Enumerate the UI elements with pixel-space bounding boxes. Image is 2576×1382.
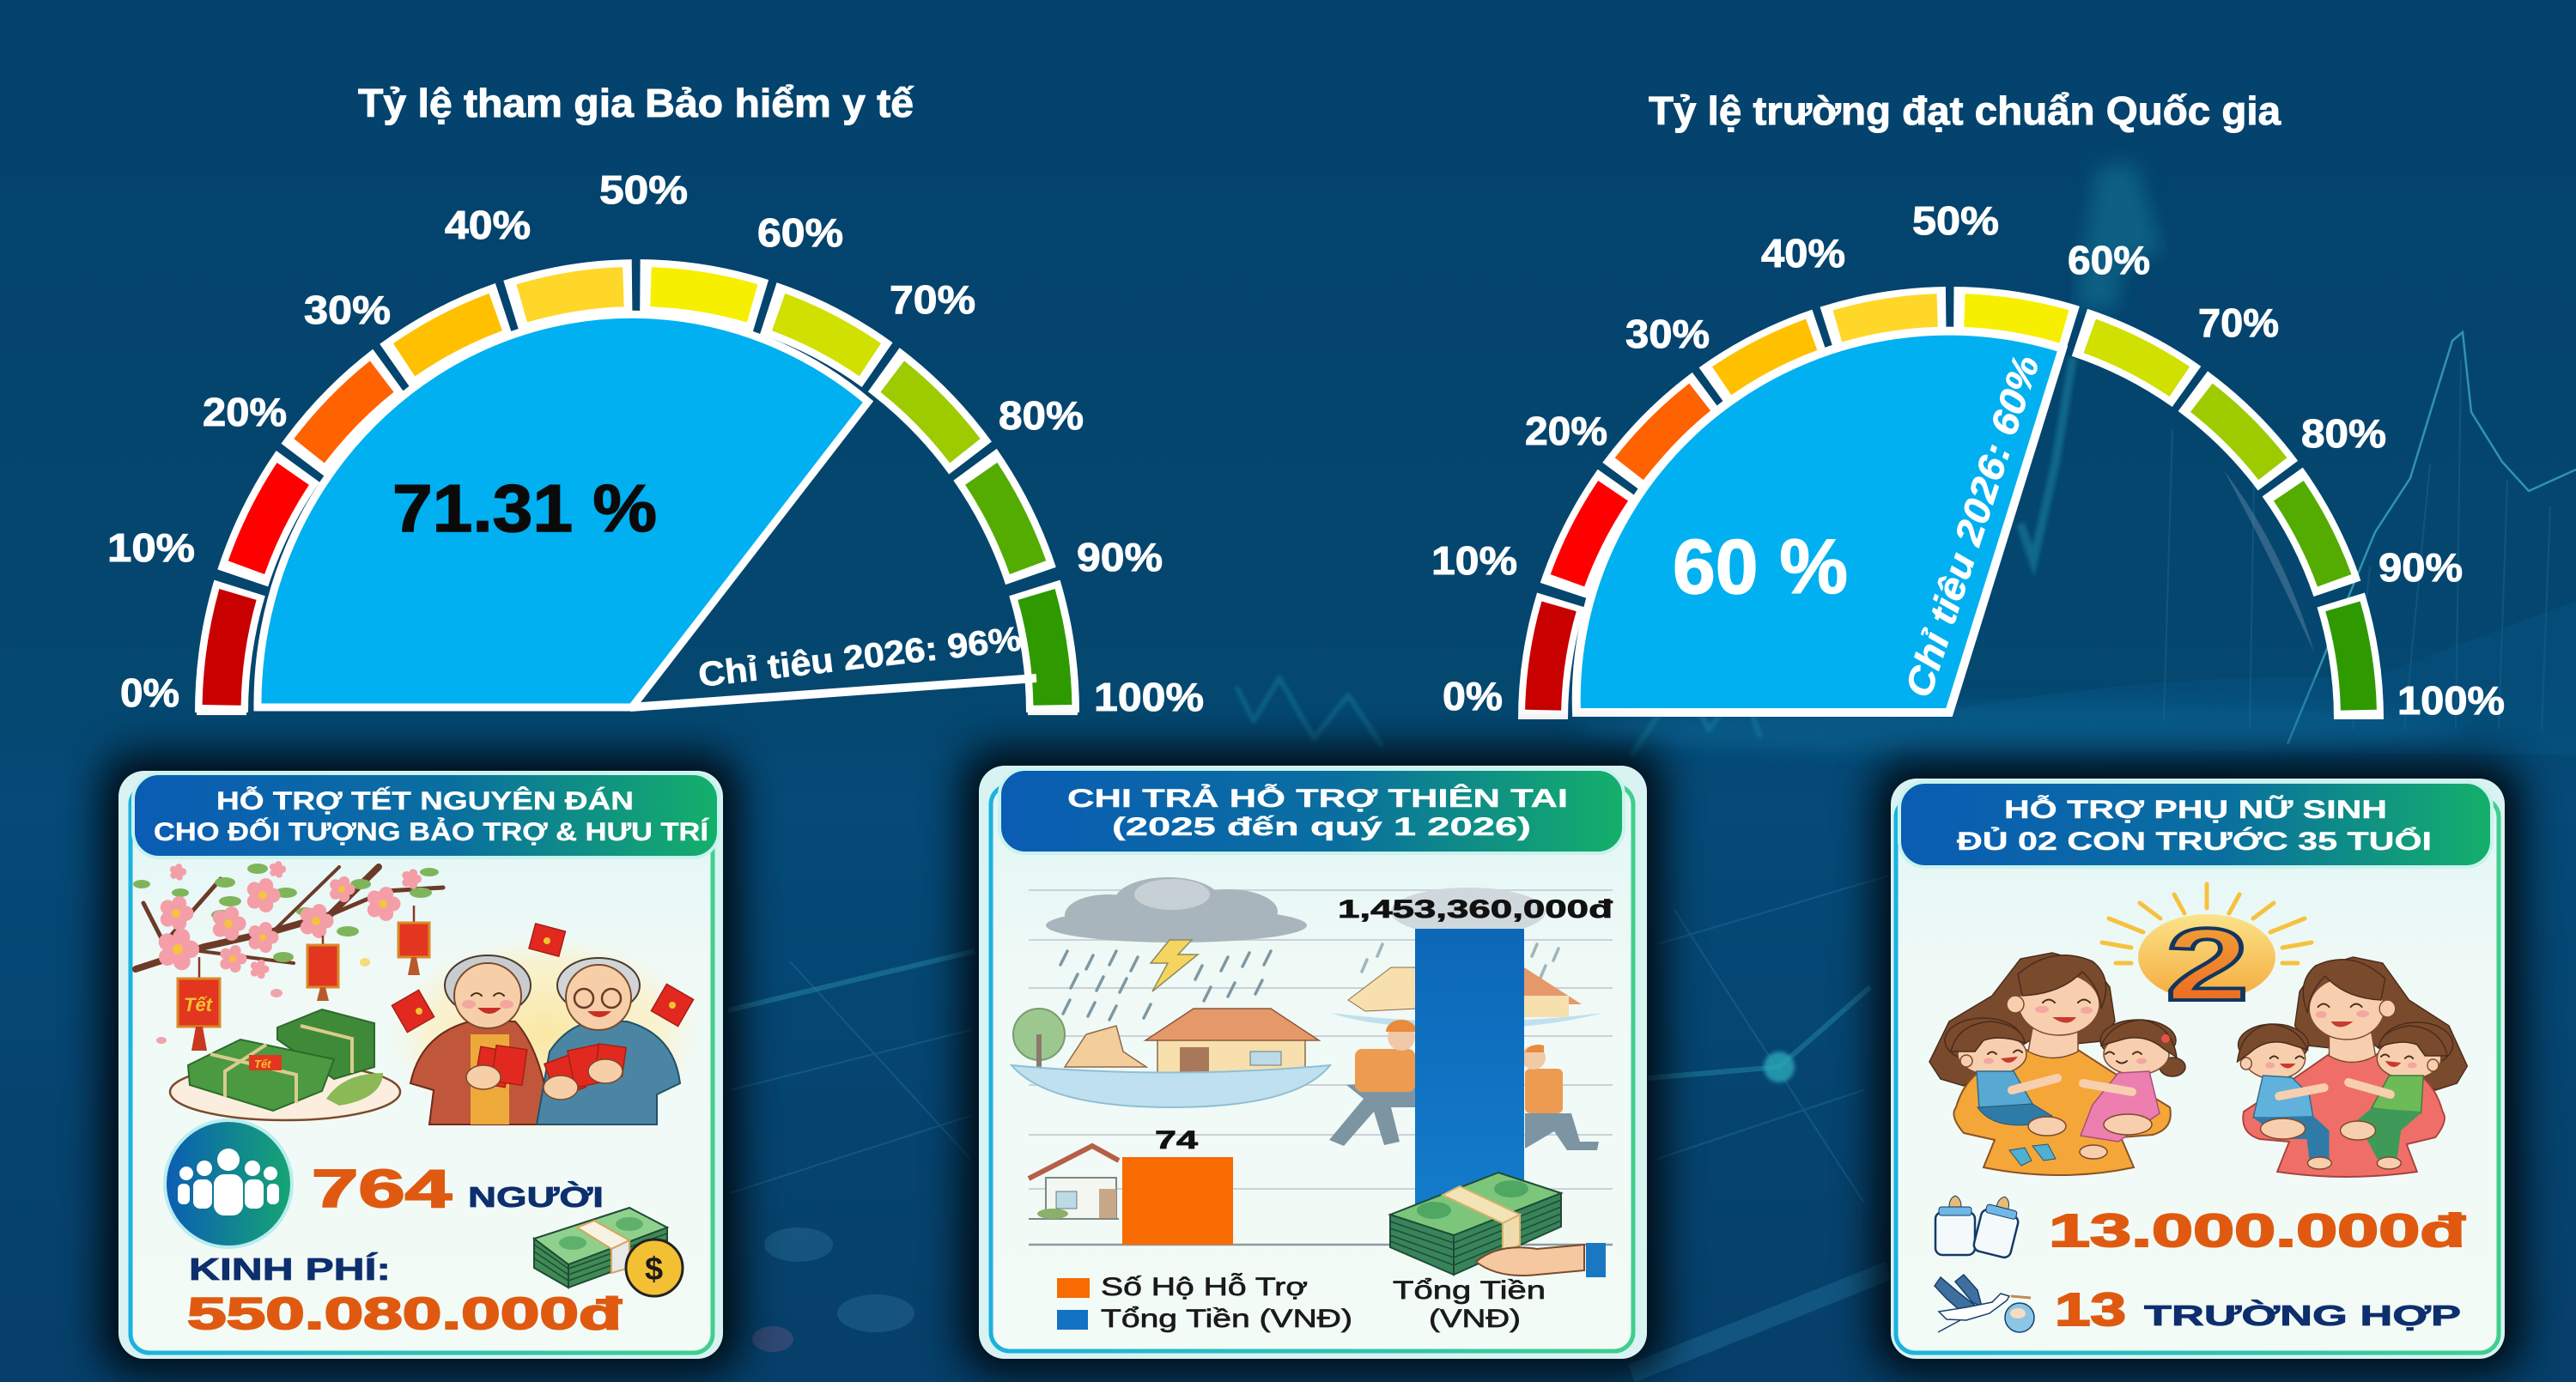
bar: households bbox=[1122, 1157, 1233, 1245]
gauge segments bbox=[1543, 294, 2359, 719]
stat: amount: 13.000.000đ bbox=[2049, 1205, 2465, 1257]
legend: Tổng Tiền (VNĐ) bbox=[1101, 1305, 1352, 1333]
scale labels: 0% bbox=[1443, 674, 1503, 718]
stat label: NGƯỜI bbox=[468, 1181, 604, 1213]
scale labels: 70% bbox=[2198, 300, 2279, 345]
stat: cases count: 13 bbox=[2055, 1284, 2126, 1336]
budget label: KINH PHÍ: bbox=[189, 1252, 391, 1287]
panel: Tet support bbox=[118, 771, 723, 1359]
scale labels bbox=[107, 167, 1204, 719]
legend bbox=[1057, 1273, 1352, 1333]
panel shadows bbox=[101, 749, 2522, 1373]
scale labels: 10% bbox=[1431, 538, 1517, 583]
panel header: ĐỦ 02 CON TRƯỚC 35 TUỔI bbox=[1957, 827, 2432, 856]
icon: money and coin: $ bbox=[645, 1252, 663, 1288]
panel header bbox=[999, 769, 1624, 853]
icon: money in hand bbox=[1390, 1173, 1606, 1277]
axis label: Tổng Tiền bbox=[1393, 1276, 1546, 1305]
panel header: CHO ĐỐI TƯỢNG BẢO TRỢ & HƯU TRÍ bbox=[154, 817, 709, 846]
panel header: CHI TRẢ HỖ TRỢ THIÊN TAI bbox=[1067, 784, 1568, 813]
stat label: TRƯỜNG HỢP bbox=[2144, 1300, 2461, 1331]
gauge: health insurance bbox=[107, 167, 1204, 719]
icon: red lanterns: Tết bbox=[184, 994, 214, 1015]
icon: banh chung bbox=[170, 1009, 400, 1120]
target label: Chỉ tiêu 2026: 60% bbox=[1898, 350, 2048, 702]
scale labels: 100% bbox=[2397, 678, 2505, 723]
scale labels: 30% bbox=[304, 288, 391, 332]
illustration: storm and flooded house bbox=[1012, 877, 1330, 1107]
value: households: 74 bbox=[1155, 1126, 1198, 1155]
icon: stork with baby bbox=[1935, 1275, 2034, 1332]
gauge value: 60 % bbox=[1673, 524, 1848, 610]
panel header bbox=[1899, 782, 2492, 867]
value: total money: 1,453,360,000đ bbox=[1338, 895, 1613, 924]
scale labels: 10% bbox=[107, 525, 195, 570]
legend: Số Hộ Hỗ Trợ bbox=[1101, 1273, 1308, 1301]
scale labels: 40% bbox=[445, 203, 531, 247]
budget value: 550.080.000đ bbox=[187, 1289, 622, 1339]
icon: money and coin bbox=[534, 1208, 683, 1296]
illustration: mother with twin boys bbox=[2238, 957, 2467, 1177]
illustration: mother with two children bbox=[1929, 953, 2185, 1175]
scale labels: 20% bbox=[1525, 409, 1607, 453]
scale labels: 70% bbox=[890, 277, 975, 322]
target label: Chỉ tiêu 2026: 96% bbox=[696, 620, 1024, 694]
scale labels: 50% bbox=[599, 167, 688, 212]
panel frame bbox=[118, 771, 723, 1359]
bar: total money bbox=[1415, 929, 1524, 1212]
axis label bbox=[1393, 1276, 1546, 1333]
scale labels: 80% bbox=[999, 393, 1084, 438]
scale labels: 100% bbox=[1094, 675, 1204, 719]
panel: maternity support bbox=[1891, 779, 2505, 1359]
panel header: HỖ TRỢ PHỤ NỮ SINH bbox=[2004, 795, 2387, 824]
gauge value: 71.31 % bbox=[392, 470, 657, 546]
panel frame bbox=[1891, 779, 2505, 1359]
scale labels: 20% bbox=[203, 390, 287, 434]
icon: sun with number 2: 2 bbox=[2166, 907, 2249, 1022]
icon: red lanterns bbox=[156, 906, 429, 1051]
scale labels: 50% bbox=[1912, 198, 1999, 243]
title: national standard schools: Tỷ lệ trường đạt chuẩn Quốc gia bbox=[1649, 88, 2281, 133]
scale labels: 60% bbox=[2068, 238, 2150, 282]
icon: people bbox=[165, 1120, 292, 1247]
icon: elderly couple with envelopes bbox=[390, 924, 699, 1134]
panel header: HỖ TRỢ TẾT NGUYÊN ĐÁN bbox=[216, 786, 634, 815]
axis label: (VNĐ) bbox=[1429, 1305, 1521, 1333]
scale labels: 0% bbox=[120, 670, 179, 715]
scale labels: 90% bbox=[1077, 535, 1163, 579]
icon: peach blossom branch bbox=[133, 864, 443, 975]
panel header: (2025 đến quý 1 2026) bbox=[1112, 813, 1531, 841]
gauge segments bbox=[197, 269, 1078, 715]
bar chart bbox=[1029, 895, 1613, 1245]
icon: sun with number 2 bbox=[2102, 884, 2312, 1022]
title: health insurance: Tỷ lệ tham gia Bảo hiểm y tế bbox=[358, 81, 914, 125]
panel: disaster relief bbox=[979, 766, 1647, 1359]
filled pie bbox=[258, 314, 868, 707]
illustration: small damaged house bbox=[1029, 1146, 1119, 1219]
icon: banh chung: Tết bbox=[254, 1058, 271, 1070]
scale labels: 30% bbox=[1625, 312, 1710, 356]
scale labels: 90% bbox=[2379, 545, 2463, 590]
panel header bbox=[133, 773, 719, 858]
scale labels: 40% bbox=[1761, 231, 1845, 276]
illustration: rescue scene behind bar bbox=[1329, 888, 1602, 1150]
panel frame bbox=[979, 766, 1647, 1359]
gauge: national standard schools bbox=[1431, 198, 2505, 723]
scale labels bbox=[1431, 198, 2505, 723]
icon: baby bottles bbox=[1935, 1192, 2024, 1259]
target line bbox=[630, 678, 1036, 707]
stat: people count: 764 bbox=[312, 1160, 453, 1219]
scale labels: 80% bbox=[2301, 411, 2386, 456]
filled pie bbox=[1577, 331, 2063, 712]
scale labels: 60% bbox=[757, 210, 843, 255]
